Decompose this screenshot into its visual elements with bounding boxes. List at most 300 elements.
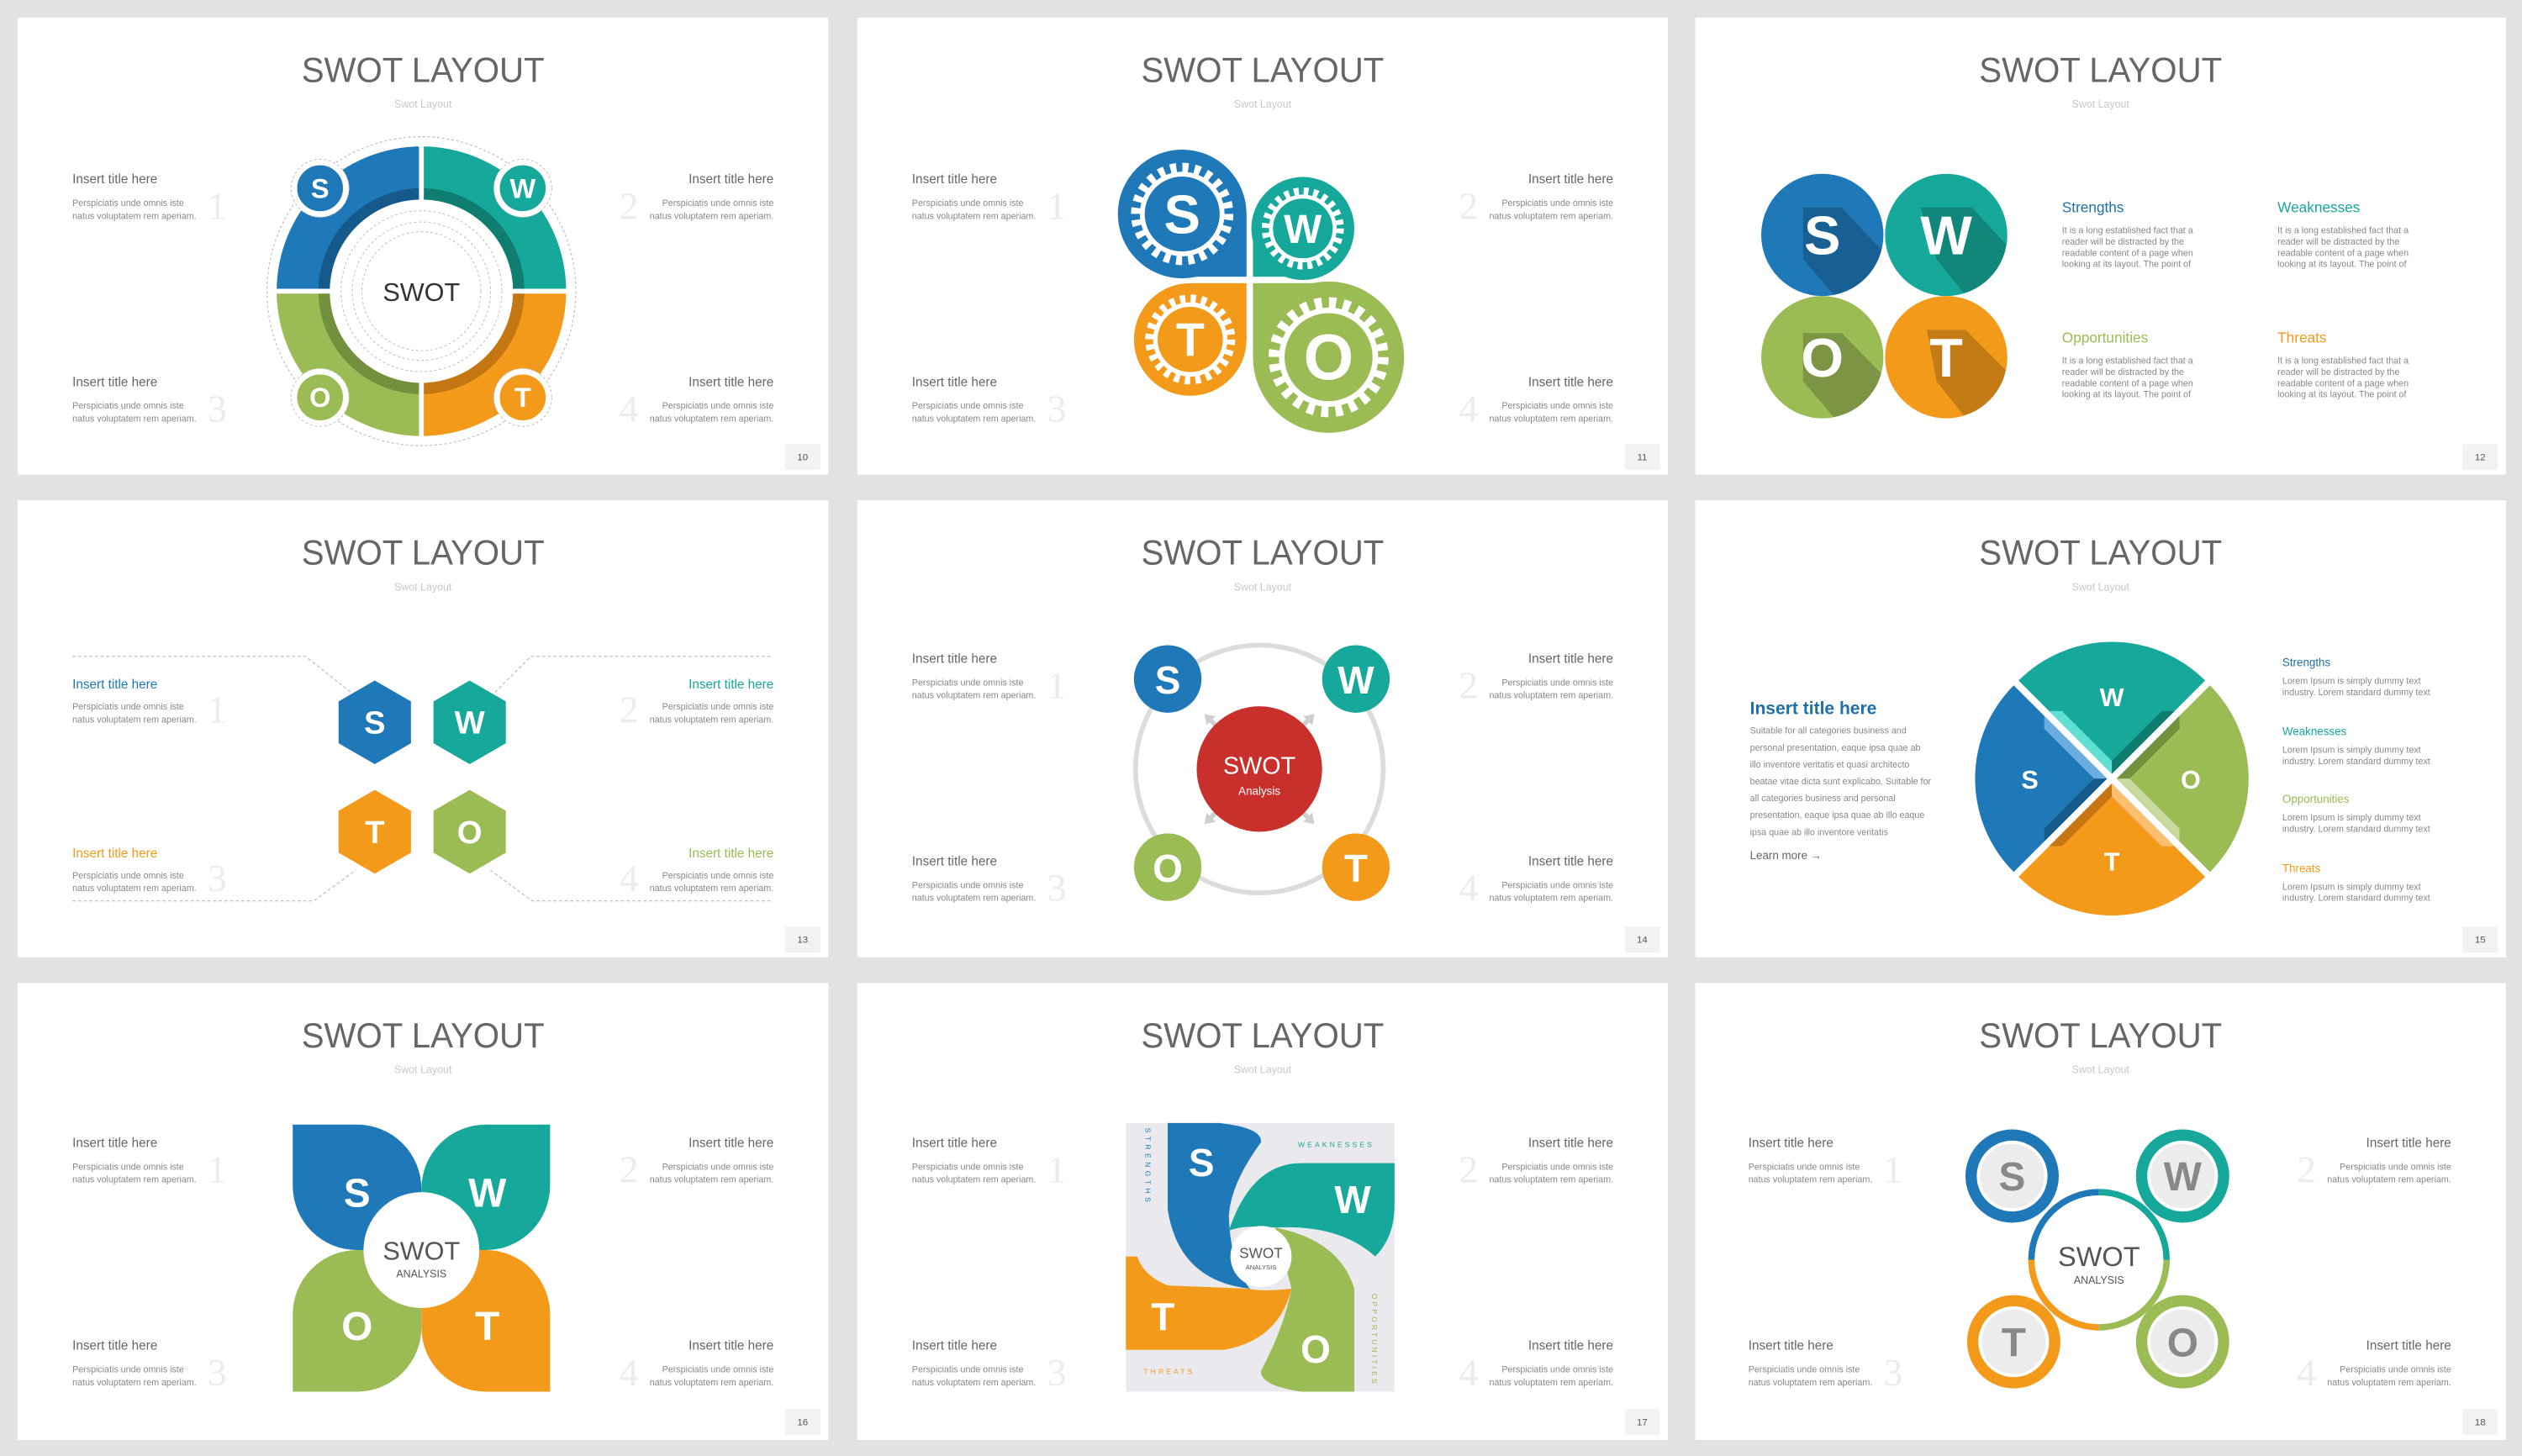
- text: opportunities: looking at its layout. The point of: [2062, 390, 2191, 400]
- text block 1: natus voluptatem rem aperiam.: [912, 211, 1036, 221]
- panel: slide 13 hexagons: [18, 500, 828, 957]
- text block 3: 3: [208, 857, 227, 899]
- text block 4: Insert title here: [2366, 1339, 2451, 1353]
- pinwheel diagram: WEAKNESSES: [1298, 1141, 1374, 1149]
- text: threats: reader will be distracted by the: [2277, 367, 2399, 377]
- text: opportunities: It is a long established fact that a: [2062, 356, 2193, 367]
- icon: W petal: [421, 1125, 550, 1250]
- text block 2: Insert title here: [1528, 1137, 1613, 1151]
- icon: T hexagon: [339, 790, 411, 873]
- text block 4: Insert title here: [1528, 1339, 1613, 1353]
- page number: 15: [2475, 935, 2486, 945]
- text block 4: natus voluptatem rem aperiam.: [1489, 414, 1613, 424]
- icon: W ring: [2136, 1129, 2229, 1222]
- text: intro: Suitable for all categories business and: [1750, 726, 1907, 736]
- text: strengths: looking at its layout. The point of: [2062, 260, 2191, 270]
- text: legend opportunities: Opportunities: [2282, 793, 2350, 805]
- text: threats: looking at its layout. The point of: [2277, 390, 2406, 400]
- text: strengths: reader will be distracted by the: [2062, 237, 2184, 247]
- text block 2: natus voluptatem rem aperiam.: [650, 211, 773, 221]
- icon: O ring: [2136, 1295, 2229, 1389]
- icon: T circle: T: [1929, 327, 1963, 388]
- icon: O: O: [1153, 847, 1183, 890]
- text block 4: [1459, 375, 1613, 430]
- text block 4: [620, 1339, 773, 1394]
- text block 4: [620, 847, 773, 899]
- text block 4: Insert title here: [1528, 375, 1613, 389]
- text block 2: 2: [1459, 664, 1478, 707]
- text block 3: natus voluptatem rem aperiam.: [912, 894, 1036, 904]
- title: SWOT LAYOUT: [302, 1016, 545, 1055]
- icon: O hexagon: [434, 790, 506, 873]
- text block 4: 4: [1459, 867, 1478, 910]
- ring diagram: [267, 137, 576, 446]
- text block 1: [1749, 1137, 1902, 1191]
- center: SWOT analysis: [363, 1192, 479, 1308]
- text block 1: Insert title here: [912, 172, 997, 187]
- cycle ring: [1136, 645, 1383, 893]
- title: SWOT LAYOUT: [302, 50, 545, 90]
- text block 2: 2: [1459, 1148, 1478, 1191]
- text block 2: natus voluptatem rem aperiam.: [1489, 691, 1613, 701]
- text: opportunities: readable content of a page when: [2062, 378, 2193, 388]
- text block 3: Insert title here: [72, 1339, 157, 1353]
- text block 1: Perspiciatis unde omnis iste: [912, 198, 1024, 208]
- icon: S badge: S: [311, 173, 330, 203]
- pie chart: W: [2100, 683, 2124, 712]
- text block 3: 3: [1047, 867, 1066, 910]
- icon: O circle: O: [1801, 327, 1844, 388]
- text: opportunities: Opportunities: [2062, 330, 2148, 346]
- pie chart: S: [2021, 766, 2039, 794]
- text: legend strengths: industry. Lorem standard dummy text: [2282, 688, 2430, 698]
- connector lines: [72, 657, 770, 901]
- text block 2: [2297, 1137, 2451, 1191]
- pinwheel diagram: STRENGTHS: [1143, 1128, 1152, 1205]
- text: opportunities: reader will be distracted by the: [2062, 367, 2184, 377]
- center: SWOT analysis: [1196, 706, 1322, 831]
- text: strengths: Strengths: [2062, 199, 2124, 216]
- text block 3: natus voluptatem rem aperiam.: [912, 1378, 1036, 1388]
- pinwheel diagram: OPPORTUNITIES: [1370, 1294, 1379, 1386]
- text block 2: Insert title here: [689, 172, 773, 187]
- text: weaknesses: readable content of a page when: [2277, 248, 2409, 258]
- title: SWOT LAYOUT: [1141, 50, 1384, 90]
- text block 3: Perspiciatis unde omnis iste: [72, 871, 184, 881]
- text block 2: Insert title here: [1528, 652, 1613, 666]
- text block 2: [1459, 652, 1613, 707]
- panel: slide 12 circles: [1696, 18, 2506, 475]
- text block 2: [1459, 172, 1613, 227]
- pinwheel diagram: W: [1334, 1178, 1371, 1221]
- text block 4: natus voluptatem rem aperiam.: [1489, 894, 1613, 904]
- icon: O petal: [293, 1250, 421, 1391]
- text block 3: Perspiciatis unde omnis iste: [1749, 1364, 1860, 1374]
- page number: [785, 1409, 820, 1435]
- text block 1: Perspiciatis unde omnis iste: [912, 678, 1024, 688]
- icon: T: T: [1344, 847, 1368, 890]
- text block 1: natus voluptatem rem aperiam.: [912, 1175, 1036, 1185]
- text block 4: 4: [620, 1351, 639, 1394]
- text: intro: Insert title here: [1750, 699, 1876, 719]
- text: legend threats: Lorem Ipsum is simply dummy text: [2282, 882, 2421, 892]
- icon: O: [1134, 833, 1201, 901]
- text block 3: Insert title here: [72, 375, 157, 389]
- icon: S petal: [293, 1125, 421, 1250]
- subtitle: Swot Layout: [394, 581, 452, 593]
- icon: O gear: [1253, 282, 1404, 433]
- icon: W gear: [1252, 177, 1354, 280]
- center: SWOT analysis: SWOT: [2058, 1242, 2140, 1272]
- text block 1: [72, 172, 227, 227]
- icon: O badge: O: [309, 382, 330, 413]
- page number: 16: [797, 1418, 808, 1428]
- title: SWOT LAYOUT: [1979, 1016, 2222, 1055]
- text block 3: Perspiciatis unde omnis iste: [72, 1364, 184, 1374]
- text block 3: Insert title here: [912, 375, 997, 389]
- text block 3: 3: [208, 1351, 227, 1394]
- text block 3: Insert title here: [912, 1339, 997, 1353]
- pie chart: T: [2104, 847, 2120, 876]
- text block 2: Insert title here: [689, 678, 773, 692]
- text: threats: [2277, 330, 2409, 400]
- text block 1: 1: [208, 1148, 227, 1191]
- text block 3: Insert title here: [72, 847, 157, 861]
- text block 4: natus voluptatem rem aperiam.: [1489, 1378, 1613, 1388]
- pinwheel diagram: [1126, 1123, 1395, 1391]
- text block 2: natus voluptatem rem aperiam.: [2327, 1175, 2451, 1185]
- center: SWOT analysis: ANALYSIS: [396, 1269, 446, 1280]
- text block 3: Insert title here: [1749, 1339, 1833, 1353]
- text block 3: [72, 375, 227, 430]
- text block 2: natus voluptatem rem aperiam.: [1489, 1175, 1613, 1185]
- pie chart: O: [2181, 766, 2201, 794]
- icon: W hexagon: [434, 681, 506, 764]
- text block 4: natus voluptatem rem aperiam.: [650, 884, 773, 894]
- icon: S badge: [291, 159, 349, 217]
- text block 4: natus voluptatem rem aperiam.: [650, 414, 773, 424]
- icon: S hexagon: [339, 681, 411, 764]
- subtitle: Swot Layout: [2072, 581, 2129, 593]
- text block 4: [1459, 855, 1613, 910]
- icon: W circle: W: [1920, 204, 1972, 266]
- page number: [1624, 926, 1659, 952]
- text block 4: Insert title here: [689, 847, 773, 861]
- text block 3: natus voluptatem rem aperiam.: [72, 414, 197, 424]
- text block 4: Perspiciatis unde omnis iste: [662, 1364, 773, 1374]
- text: threats: readable content of a page when: [2277, 378, 2409, 388]
- title: SWOT LAYOUT: [1979, 533, 2222, 572]
- text block 1: Insert title here: [72, 1137, 157, 1151]
- pinwheel diagram: ANALYSIS: [1246, 1263, 1276, 1271]
- text block 1: Perspiciatis unde omnis iste: [72, 702, 184, 712]
- text block 4: 4: [1459, 1351, 1478, 1394]
- text block 3: [912, 375, 1066, 430]
- text block 1: Perspiciatis unde omnis iste: [1749, 1162, 1860, 1172]
- pinwheel diagram: O: [1301, 1327, 1331, 1371]
- text block 3: Perspiciatis unde omnis iste: [912, 401, 1024, 411]
- icon: O badge: [291, 368, 349, 426]
- center: SWOT analysis: Analysis: [1238, 784, 1280, 797]
- text: intro: [1750, 699, 1931, 862]
- icon: T: [1322, 833, 1390, 901]
- text block 3: [72, 1339, 227, 1394]
- text block 2: natus voluptatem rem aperiam.: [1489, 211, 1613, 221]
- subtitle: Swot Layout: [1234, 1064, 1292, 1076]
- text block 2: Insert title here: [689, 1137, 773, 1151]
- subtitle: Swot Layout: [2072, 98, 2129, 110]
- text block 3: Perspiciatis unde omnis iste: [912, 1364, 1024, 1374]
- page number: [2462, 1409, 2498, 1435]
- text block 2: [1459, 1137, 1613, 1191]
- text: legend weaknesses: Weaknesses: [2282, 725, 2347, 738]
- text block 1: 1: [1047, 184, 1066, 227]
- pinwheel diagram: S: [1189, 1141, 1215, 1184]
- title: SWOT LAYOUT: [302, 533, 545, 572]
- panel: slide 15 pie: [1696, 500, 2506, 957]
- text block 1: [912, 172, 1066, 227]
- icon: T circle: [1885, 296, 2008, 419]
- panel: slide 17 pinwheel: [857, 983, 1668, 1440]
- text: legend weaknesses: Lorem Ipsum is simply dummy text: [2282, 746, 2421, 756]
- text block 2: Perspiciatis unde omnis iste: [1501, 1162, 1613, 1172]
- text block 4: natus voluptatem rem aperiam.: [650, 1378, 773, 1388]
- text: legend opportunities: industry. Lorem standard dummy text: [2282, 824, 2430, 834]
- ring diagram: SWOT: [383, 278, 460, 307]
- page number: 12: [2475, 452, 2486, 462]
- text: strengths: [2062, 199, 2193, 270]
- text: legend strengths: Lorem Ipsum is simply dummy text: [2282, 676, 2421, 686]
- text block 1: Insert title here: [912, 652, 997, 666]
- page number: [785, 444, 820, 470]
- text: intro: ipsa quae ab illo inventore veritatis: [1750, 827, 1888, 837]
- panel: slide 14 cycle: [857, 500, 1668, 957]
- center: SWOT analysis: [2034, 1195, 2163, 1324]
- text: legend threats: industry. Lorem standard dummy text: [2282, 894, 2430, 904]
- arrows: [1200, 710, 1319, 829]
- icon: W petal: W: [468, 1171, 507, 1216]
- page number: 13: [797, 935, 808, 945]
- title: SWOT LAYOUT: [1141, 533, 1384, 572]
- text block 1: natus voluptatem rem aperiam.: [912, 691, 1036, 701]
- text block 4: Perspiciatis unde omnis iste: [1501, 401, 1613, 411]
- text block 2: 2: [620, 1148, 639, 1191]
- text block 4: Perspiciatis unde omnis iste: [2340, 1364, 2451, 1374]
- text: intro: Learn more →: [1750, 849, 1822, 862]
- icon: W gear: W: [1284, 208, 1322, 252]
- icon: S gear: S: [1164, 183, 1200, 245]
- page number: [1624, 1409, 1659, 1435]
- text block 1: 1: [208, 184, 227, 227]
- text block 4: 4: [1459, 387, 1478, 430]
- text block 3: natus voluptatem rem aperiam.: [72, 1378, 197, 1388]
- page number: [2462, 926, 2498, 952]
- icon: T petal: [421, 1250, 550, 1391]
- text block 4: Perspiciatis unde omnis iste: [1501, 880, 1613, 890]
- icon: S gear: [1118, 150, 1247, 278]
- text block 2: [620, 1137, 773, 1191]
- text block 2: 2: [620, 688, 639, 731]
- icon: T gear: [1134, 283, 1247, 396]
- text block 1: Insert title here: [912, 1137, 997, 1151]
- icon: S circle: [1761, 173, 1883, 296]
- text block 3: natus voluptatem rem aperiam.: [72, 884, 197, 894]
- panel: slide 16 petals: [18, 983, 828, 1440]
- text block 2: Insert title here: [1528, 172, 1613, 187]
- text block 4: Perspiciatis unde omnis iste: [662, 401, 773, 411]
- text: legend strengths: [2282, 656, 2430, 698]
- connector arcs: [2031, 1192, 2166, 1327]
- icon: W badge: W: [509, 173, 536, 203]
- subtitle: Swot Layout: [2072, 1064, 2129, 1076]
- text: legend threats: Threats: [2282, 862, 2321, 874]
- text block 3: [1749, 1339, 1902, 1394]
- text block 2: 2: [1459, 184, 1478, 227]
- icon: W hexagon: W: [455, 705, 486, 741]
- page number: 11: [1637, 452, 1647, 462]
- icon: T badge: [493, 368, 551, 426]
- icon: S hexagon: S: [364, 705, 386, 741]
- page number: 18: [2475, 1418, 2486, 1428]
- title: SWOT LAYOUT: [1141, 1016, 1384, 1055]
- text block 3: [912, 855, 1066, 910]
- icon: W: W: [1338, 658, 1374, 702]
- text: intro: illo inventore veritatis et quasi architecto: [1750, 760, 1909, 770]
- page number: [2462, 444, 2498, 470]
- text: intro: presentation, eaque ipsa quae ab illo eaque: [1750, 810, 1924, 820]
- icon: T ring: T: [2002, 1321, 2026, 1365]
- text block 3: natus voluptatem rem aperiam.: [912, 414, 1036, 424]
- icon: O petal: O: [341, 1305, 372, 1349]
- page number: [785, 926, 820, 952]
- text block 3: Perspiciatis unde omnis iste: [912, 880, 1024, 890]
- center: SWOT analysis: SWOT: [1223, 753, 1295, 780]
- text block 3: [912, 1339, 1066, 1394]
- text: opportunities: [2062, 330, 2193, 400]
- text: intro: personal presentation, eaque ipsa quae ab: [1750, 743, 1921, 753]
- icon: T badge: T: [514, 382, 531, 413]
- text: legend opportunities: [2282, 793, 2430, 834]
- text block 4: natus voluptatem rem aperiam.: [2327, 1378, 2451, 1388]
- text block 1: Perspiciatis unde omnis iste: [72, 1162, 184, 1172]
- text block 1: [912, 1137, 1066, 1191]
- text block 3: Insert title here: [912, 855, 997, 869]
- text block 4: Insert title here: [689, 375, 773, 389]
- text: intro: beatae vitae dicta sunt explicabo. Suitable for: [1750, 777, 1931, 787]
- icon: W: [1322, 645, 1390, 713]
- text: strengths: readable content of a page when: [2062, 248, 2193, 258]
- subtitle: Swot Layout: [1234, 98, 1292, 110]
- text: threats: It is a long established fact that a: [2277, 356, 2409, 367]
- text block 1: [72, 1137, 227, 1191]
- icon: S circle: S: [1804, 204, 1840, 266]
- text: legend opportunities: Lorem Ipsum is simply dummy text: [2282, 813, 2421, 823]
- icon: O ring: O: [2167, 1321, 2198, 1365]
- text block 2: Perspiciatis unde omnis iste: [1501, 198, 1613, 208]
- text block 2: Perspiciatis unde omnis iste: [2340, 1162, 2451, 1172]
- text block 1: 1: [208, 688, 227, 731]
- text block 1: Insert title here: [72, 678, 157, 692]
- text block 1: Insert title here: [72, 172, 157, 187]
- icon: T hexagon: T: [365, 815, 384, 851]
- text: threats: Threats: [2277, 330, 2327, 346]
- text block 4: [1459, 1339, 1613, 1394]
- title: SWOT LAYOUT: [1979, 50, 2222, 90]
- center: SWOT analysis: SWOT: [383, 1237, 460, 1266]
- text block 1: 1: [1047, 1148, 1066, 1191]
- text block 1: natus voluptatem rem aperiam.: [1749, 1175, 1872, 1185]
- text: weaknesses: Weaknesses: [2277, 199, 2360, 216]
- icon: T gear: T: [1176, 314, 1205, 366]
- icon: W badge: [493, 159, 551, 217]
- text block 3: 3: [1883, 1351, 1902, 1394]
- subtitle: Swot Layout: [394, 1064, 452, 1076]
- text block 3: 3: [1047, 387, 1066, 430]
- text block 3: [72, 847, 227, 899]
- text block 1: natus voluptatem rem aperiam.: [72, 1175, 197, 1185]
- text block 1: 1: [1883, 1148, 1902, 1191]
- icon: S petal: S: [344, 1171, 371, 1216]
- text block 4: Perspiciatis unde omnis iste: [662, 871, 773, 881]
- panel: slide 10 ring: [18, 18, 828, 475]
- icon: S ring: S: [1999, 1155, 2025, 1200]
- text block 1: Perspiciatis unde omnis iste: [912, 1162, 1024, 1172]
- text block 2: 2: [2297, 1148, 2316, 1191]
- page number: 10: [797, 452, 808, 462]
- icon: O hexagon: O: [457, 815, 483, 851]
- text: legend strengths: Strengths: [2282, 656, 2330, 668]
- text: legend weaknesses: industry. Lorem standard dummy text: [2282, 757, 2430, 767]
- text block 1: [912, 652, 1066, 707]
- text block 4: 4: [620, 387, 639, 430]
- text block 2: Insert title here: [2366, 1137, 2451, 1151]
- subtitle: Swot Layout: [1234, 581, 1292, 593]
- text block 4: Insert title here: [1528, 855, 1613, 869]
- pinwheel diagram: THREATS: [1143, 1367, 1195, 1375]
- panel: slide 18 connected circles: [1696, 983, 2506, 1440]
- icon: S: [1134, 645, 1201, 713]
- icon: O gear: O: [1304, 323, 1353, 394]
- text: intro: all categories business and personal: [1750, 794, 1896, 804]
- text block 1: [72, 678, 227, 731]
- page number: 17: [1637, 1418, 1648, 1428]
- text block 3: 3: [1047, 1351, 1066, 1394]
- text block 1: Insert title here: [1749, 1137, 1833, 1151]
- text block 3: 3: [208, 387, 227, 430]
- pinwheel diagram: T: [1151, 1295, 1174, 1339]
- text block 2: [620, 678, 773, 731]
- text block 4: 4: [2297, 1351, 2316, 1394]
- pinwheel diagram: SWOT: [1239, 1245, 1283, 1262]
- icon: T ring: [1967, 1295, 2060, 1389]
- text block 2: 2: [620, 184, 639, 227]
- panel: slide 11 gears: [857, 18, 1668, 475]
- text: legend threats: [2282, 862, 2430, 904]
- icon: W ring: W: [2164, 1155, 2203, 1200]
- icon: T petal: T: [475, 1305, 499, 1349]
- text block 4: [2297, 1339, 2451, 1394]
- page number: 14: [1637, 935, 1648, 945]
- text block 1: natus voluptatem rem aperiam.: [72, 715, 197, 725]
- icon: S: S: [1155, 658, 1180, 702]
- text block 2: Perspiciatis unde omnis iste: [662, 198, 773, 208]
- text block 1: Perspiciatis unde omnis iste: [72, 198, 184, 208]
- text: weaknesses: looking at its layout. The point of: [2277, 260, 2406, 270]
- text block 4: Perspiciatis unde omnis iste: [1501, 1364, 1613, 1374]
- icon: W circle: [1885, 173, 2008, 296]
- text block 4: Insert title here: [689, 1339, 773, 1353]
- text: weaknesses: [2277, 199, 2409, 270]
